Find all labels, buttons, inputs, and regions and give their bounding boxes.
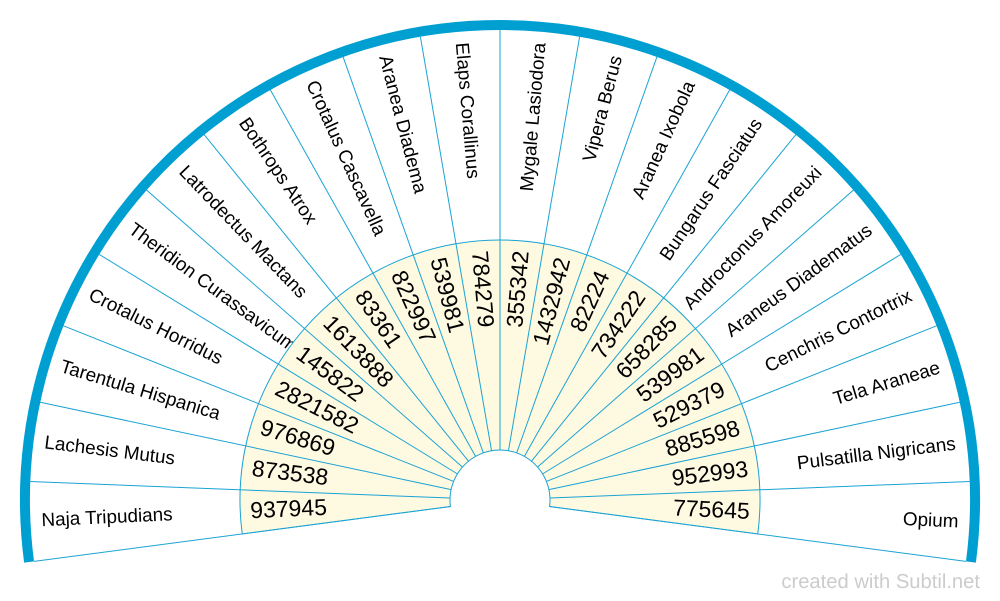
label: Mygale Lasiodora: Mygale Lasiodora	[517, 41, 551, 192]
value: 885598: 885598	[662, 415, 743, 462]
label: Theridion Curassavicum: Theridion Curassavicum	[124, 219, 301, 357]
label: Tarentula Hispanica: Tarentula Hispanica	[58, 356, 223, 425]
label: Latrodectus Mactans: Latrodectus Mactans	[175, 162, 311, 303]
value: 529379: 529379	[649, 376, 729, 434]
value: 83361: 83361	[350, 285, 407, 353]
cream inner band	[240, 240, 760, 534]
label: Aranea Ixobola: Aranea Ixobola	[628, 78, 700, 202]
label: Araneus Diadematus: Araneus Diadematus	[722, 220, 876, 342]
label: Lachesis Mutus: Lachesis Mutus	[43, 432, 176, 469]
label: Elaps Corallinus: Elaps Corallinus	[451, 42, 483, 180]
value: 658285: 658285	[610, 310, 682, 384]
value: 734222: 734222	[586, 285, 651, 364]
values	[250, 250, 750, 524]
value: 1432942: 1432942	[527, 255, 575, 348]
label: Crotalus Cascavella: Crotalus Cascavella	[301, 77, 390, 240]
value: 539981: 539981	[631, 341, 709, 407]
label: Pulsatilla Nigricans: Pulsatilla Nigricans	[796, 434, 957, 474]
value: 355342: 355342	[501, 250, 534, 328]
label: Androctonus Amoreuxi: Androctonus Amoreuxi	[680, 163, 826, 314]
credit: created with Subtil.net	[781, 571, 980, 593]
value: 873538: 873538	[250, 455, 330, 490]
value: 976869: 976869	[257, 414, 338, 461]
outer labels	[41, 41, 959, 533]
value: 82224: 82224	[564, 267, 615, 336]
value: 539981: 539981	[425, 255, 470, 335]
label: Opium: Opium	[902, 509, 959, 533]
value: 145822: 145822	[292, 340, 369, 407]
value: 2821582: 2821582	[271, 375, 363, 439]
label: Cenchris Contortrix: Cenchris Contortrix	[762, 286, 916, 377]
value: 784279: 784279	[467, 250, 499, 328]
label: Tela Araneae: Tela Araneae	[831, 358, 943, 410]
label: Bothrops Atrox: Bothrops Atrox	[234, 114, 321, 229]
label: Crotalus Horridus: Crotalus Horridus	[85, 285, 226, 369]
value: 822997: 822997	[386, 266, 441, 347]
label: Naja Tripudians: Naja Tripudians	[41, 504, 173, 531]
value: 952993: 952993	[670, 456, 750, 491]
value: 937945: 937945	[250, 494, 327, 523]
value: 1613888: 1613888	[318, 310, 399, 393]
label: Bungarus Fasciatus: Bungarus Fasciatus	[656, 115, 767, 265]
label: Aranea Diadema: Aranea Diadema	[374, 53, 430, 196]
label: Vipera Berus: Vipera Berus	[579, 53, 627, 164]
value: 775645: 775645	[672, 494, 750, 524]
